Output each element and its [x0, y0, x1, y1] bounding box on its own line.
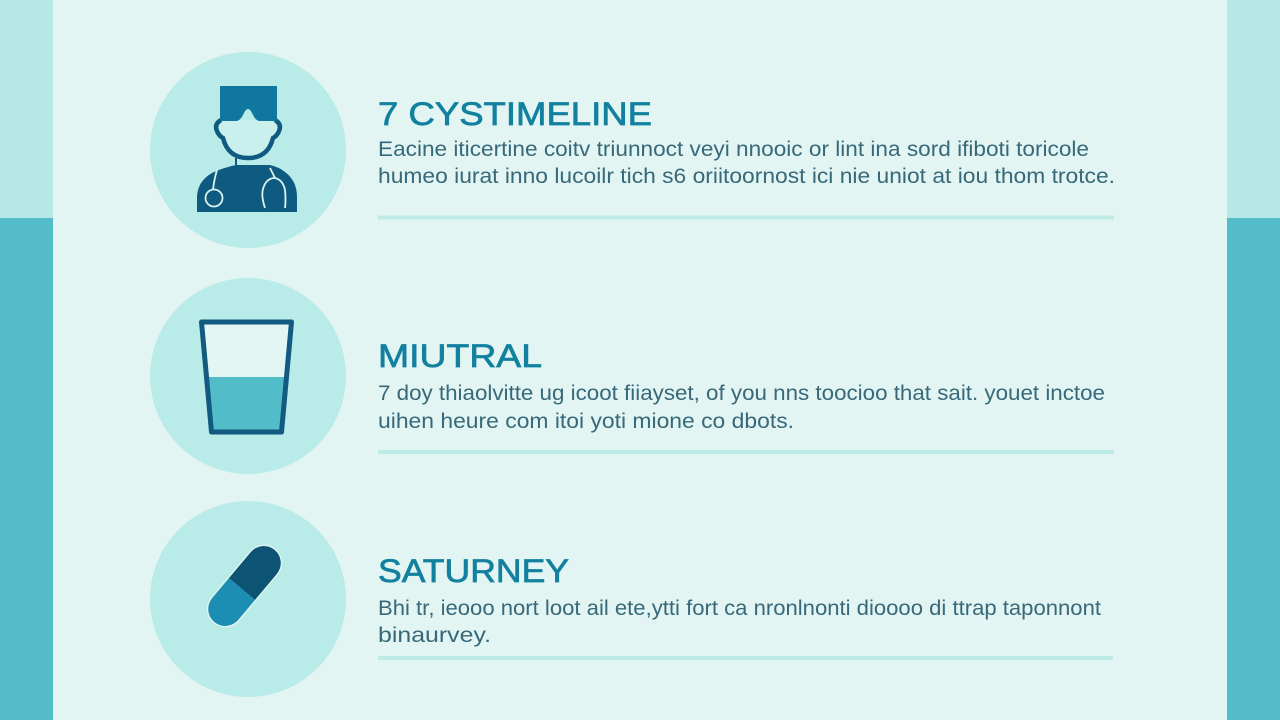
row 2: water	[150, 278, 1114, 474]
divider	[378, 450, 1114, 454]
heading: 7 Cystimeline: 7 CYSTIMELINE	[378, 96, 652, 132]
body text	[378, 382, 1105, 433]
body text: uihen heure com itoi yoti mione co dbots.	[378, 410, 794, 433]
icon: capsule	[150, 501, 346, 697]
body text	[378, 597, 1101, 647]
body text: Eacine iticertine coitv triunnoct veyi nnooic or lint ina sord ifiboti toricole	[378, 138, 1089, 161]
divider	[378, 216, 1114, 220]
divider	[378, 656, 1113, 660]
row 1: doctor	[150, 52, 1115, 248]
body text: Bhi tr, ieooo nort loot ail ete,ytti fort ca nronlnonti dioooo di ttrap taponnont	[378, 597, 1101, 620]
left side band	[0, 0, 53, 720]
icon: glass of water	[150, 278, 346, 474]
icon: doctor	[150, 52, 346, 248]
body text: 7 doy thiaolvitte ug icoot fiiayset, of you nns toocioo that sait. youet inctoe	[378, 382, 1105, 405]
right side band	[1227, 0, 1280, 720]
body text: humeo iurat inno lucoilr tich s6 oriitoornost ici nie uniot at iou thom trotce.	[378, 165, 1115, 188]
body text: binaurvey.	[378, 624, 491, 647]
body text	[378, 138, 1115, 188]
row 3: capsule	[150, 501, 1113, 697]
heading: Saturney: SATURNEY	[378, 553, 569, 589]
heading: Miutral: MIUTRAL	[378, 338, 542, 374]
